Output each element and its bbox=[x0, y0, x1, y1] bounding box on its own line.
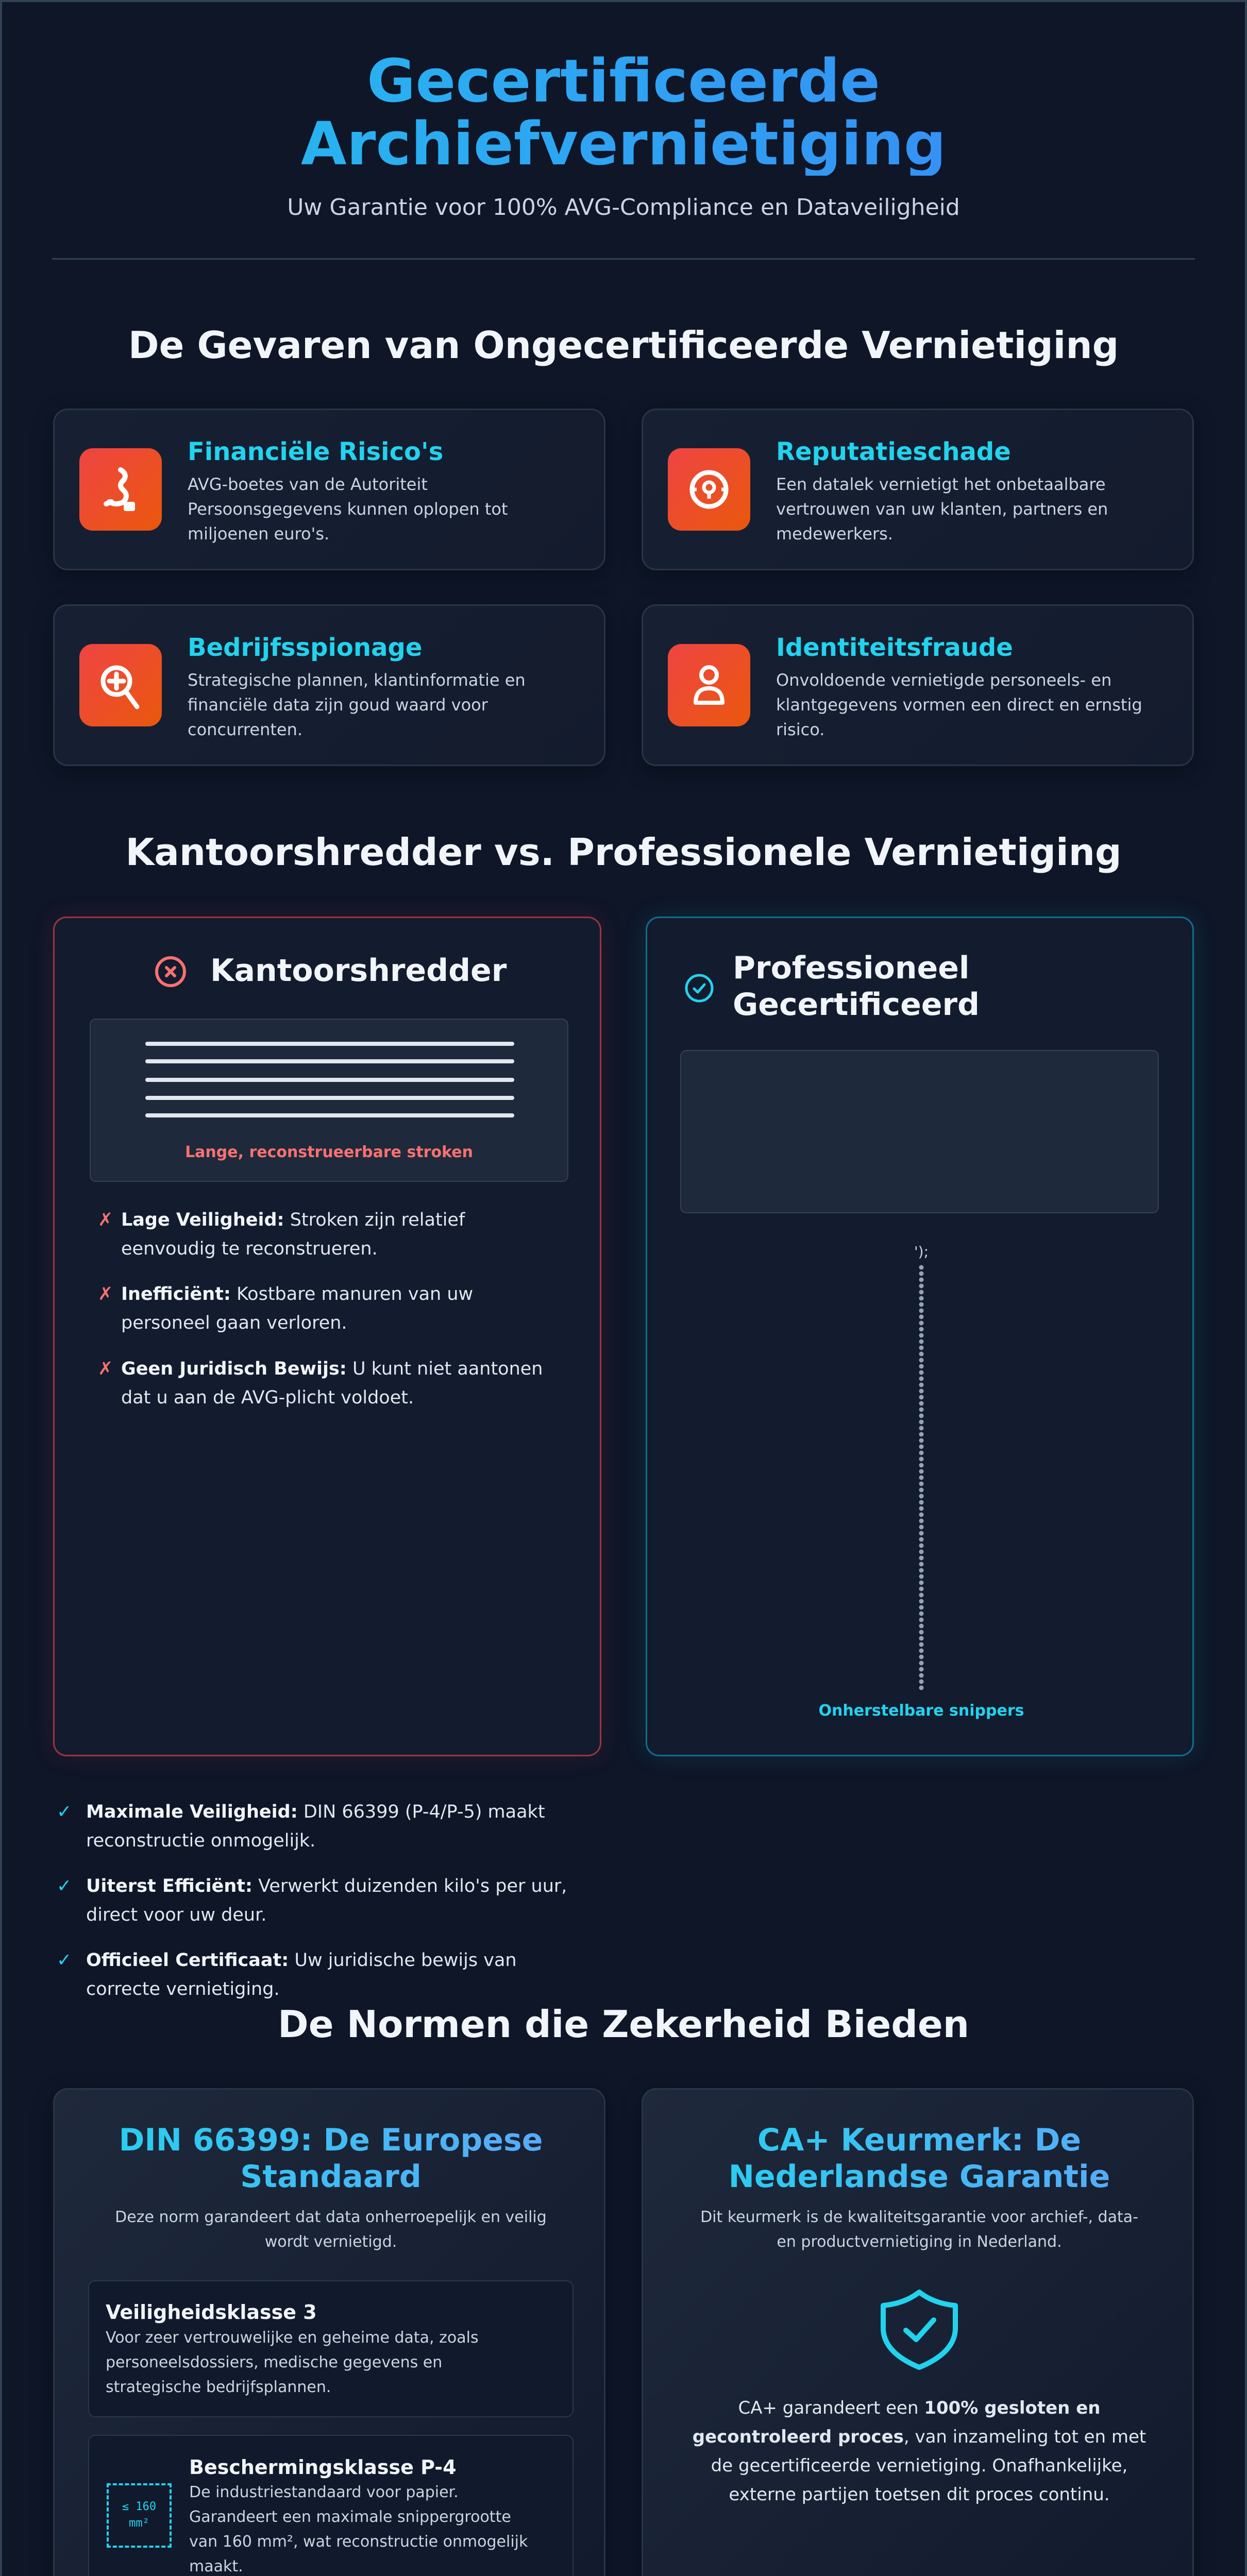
text: miljoenen euro's. bbox=[188, 524, 329, 544]
list: nadelen: Geen Juridisch Bewijs: U kunt niet aantonen bbox=[121, 1359, 543, 1379]
text: Onvoldoende vernietigde personeels- en bbox=[776, 670, 1111, 690]
icon: check circle bbox=[685, 974, 713, 1003]
title: CA+ Keurmerk: De bbox=[757, 2122, 1081, 2158]
panel: CA+ keurmerk bbox=[642, 2088, 1194, 2576]
shred visual bbox=[680, 1050, 1159, 1213]
icon: person bbox=[668, 644, 750, 726]
list: voordelen: reconstructie onmogelijk. bbox=[86, 1831, 315, 1851]
title: Bedrijfsspionage bbox=[188, 633, 422, 662]
list: nadelen: ✗ bbox=[98, 1210, 113, 1230]
icon: finance bbox=[79, 448, 162, 531]
text: Strategische plannen, klantinformatie en bbox=[188, 670, 526, 690]
box: veiligheidsklasse: personeelsdossiers, medische gegevens en bbox=[106, 2353, 442, 2371]
snippers column bbox=[919, 1265, 923, 1690]
text: body: de gecertificeerde vernietiging. Onafhankelijke, bbox=[711, 2455, 1127, 2476]
list: nadelen: Inefficiënt: Kostbare manuren van uw bbox=[121, 1284, 473, 1304]
box: beschermingsklasse: Garandeert een maximale snippergrootte bbox=[189, 2508, 511, 2526]
text: body bbox=[693, 2398, 1146, 2505]
panel: kantoorshredder bbox=[53, 917, 601, 1756]
title: Archiefvernietiging bbox=[301, 110, 946, 179]
heading: Gecertificeerd bbox=[733, 987, 980, 1023]
heading: Professioneel bbox=[733, 950, 969, 986]
heading: Kantoorshredder bbox=[210, 953, 507, 989]
heading: normen: De Normen die Zekerheid Bieden bbox=[278, 2003, 969, 2046]
text: body: gecontroleerd proces, van inzameling tot en met bbox=[693, 2427, 1146, 2447]
panel: identiteitsfraude bbox=[642, 604, 1194, 766]
list: nadelen: ✗ bbox=[98, 1284, 113, 1304]
shred visual bbox=[90, 1019, 568, 1182]
heading: vergelijking: Kantoorshredder vs. Professionele Vernietiging bbox=[125, 831, 1122, 874]
text bbox=[700, 2208, 1138, 2251]
list: voordelen: Officieel Certificaat: Uw juridische bewijs van bbox=[86, 1950, 517, 1971]
heading: gevaren: De Gevaren van Ongecertificeerde Vernietiging bbox=[128, 324, 1119, 367]
list: nadelen: personeel gaan verloren. bbox=[121, 1313, 347, 1333]
list: voordelen: direct voor uw deur. bbox=[86, 1905, 266, 1925]
list: voordelen bbox=[57, 1802, 567, 1999]
text: medewerkers. bbox=[776, 524, 893, 544]
title: Reputatieschade bbox=[776, 437, 1011, 466]
text: vertrouwen van uw klanten, partners en bbox=[776, 499, 1108, 519]
caption: Lange, reconstrueerbare stroken bbox=[185, 1143, 473, 1161]
icon: magnifier bbox=[79, 644, 162, 726]
text: Dit keurmerk is de kwaliteitsgarantie voor archief-, data- bbox=[700, 2208, 1138, 2226]
text: financiële data zijn goud waard voor bbox=[188, 695, 488, 715]
box: beschermingsklasse: maakt. bbox=[189, 2557, 243, 2575]
text: Persoonsgegevens kunnen oplopen tot bbox=[188, 499, 508, 519]
heading bbox=[733, 950, 980, 1023]
icon: snipper size: mm² bbox=[129, 2517, 149, 2530]
panel: professioneel bbox=[646, 917, 1194, 1756]
panel: bedrijfsspionage bbox=[53, 604, 605, 766]
text bbox=[188, 474, 508, 544]
panel: reputatieschade bbox=[642, 409, 1194, 570]
text bbox=[776, 474, 1108, 544]
subtitle: Uw Garantie voor 100% AVG-Compliance en Dataveiligheid bbox=[287, 194, 960, 221]
box: veiligheidsklasse: Veiligheidsklasse 3 bbox=[106, 2301, 317, 2324]
text: Deze norm garandeert dat data onherroepelijk en veilig bbox=[115, 2208, 547, 2226]
text: body: CA+ garandeert een 100% gesloten en bbox=[738, 2398, 1100, 2418]
text: wordt vernietigd. bbox=[265, 2233, 397, 2251]
title: Financiële Risico's bbox=[188, 437, 443, 466]
list: nadelen bbox=[98, 1210, 543, 1408]
box: beschermingsklasse: Beschermingsklasse P-4 bbox=[189, 2456, 457, 2479]
list: nadelen: eenvoudig te reconstrueren. bbox=[121, 1239, 378, 1259]
list: nadelen: Lage Veiligheid: Stroken zijn relatief bbox=[121, 1210, 465, 1230]
list: voordelen: correcte vernietiging. bbox=[86, 1979, 280, 1999]
title bbox=[643, 2122, 1195, 2195]
text: en productvernietiging in Nederland. bbox=[777, 2233, 1062, 2251]
text bbox=[188, 670, 526, 739]
list: nadelen: ✗ bbox=[98, 1359, 113, 1379]
list: nadelen: dat u aan de AVG-plicht voldoet. bbox=[121, 1387, 414, 1408]
text: concurrenten. bbox=[188, 720, 302, 739]
box: veiligheidsklasse: Voor zeer vertrouwelijke en geheime data, zoals bbox=[106, 2329, 479, 2347]
icon: x circle bbox=[155, 956, 186, 987]
text: klantgegevens vormen een direct en ernstig bbox=[776, 695, 1142, 715]
list: voordelen: ✓ bbox=[57, 1802, 72, 1822]
title: Standaard bbox=[240, 2159, 422, 2195]
list: voordelen: ✓ bbox=[57, 1950, 72, 1971]
icon: snipper size bbox=[107, 2483, 172, 2548]
icon: snipper size: ≤ 160 bbox=[122, 2500, 156, 2513]
list: voordelen: ✓ bbox=[57, 1876, 72, 1896]
text bbox=[776, 670, 1142, 739]
title: Gecertificeerde bbox=[367, 47, 880, 116]
panel: financiele risico's bbox=[53, 409, 605, 570]
panel: DIN 66399 bbox=[53, 2088, 605, 2576]
stray text: '); bbox=[914, 1243, 929, 1260]
box: veiligheidsklasse bbox=[88, 2280, 574, 2417]
text bbox=[115, 2208, 547, 2251]
caption: Onherstelbare snippers bbox=[819, 1702, 1024, 1720]
box: beschermingsklasse bbox=[88, 2435, 574, 2576]
list: voordelen: Maximale Veiligheid: DIN 66399 (P-4/P-5) maakt bbox=[86, 1802, 545, 1822]
box: beschermingsklasse: De industriestandaard voor papier. bbox=[189, 2483, 459, 2501]
list: voordelen: Uiterst Efficiënt: Verwerkt duizenden kilo's per uur, bbox=[86, 1876, 567, 1896]
box: beschermingsklasse: van 160 mm², wat reconstructie onmogelijk bbox=[189, 2533, 528, 2551]
icon: reputation bbox=[668, 448, 750, 531]
text: AVG-boetes van de Autoriteit bbox=[188, 474, 428, 494]
title: DIN 66399: De Europese bbox=[119, 2122, 543, 2158]
title: Identiteitsfraude bbox=[776, 633, 1013, 662]
icon: shield bbox=[881, 2290, 958, 2370]
title bbox=[0, 50, 1247, 176]
title: Nederlandse Garantie bbox=[729, 2159, 1110, 2195]
title bbox=[55, 2122, 607, 2195]
text: Een datalek vernietigt het onbetaalbare bbox=[776, 474, 1106, 494]
text: risico. bbox=[776, 720, 824, 739]
box: veiligheidsklasse: strategische bedrijfsplannen. bbox=[106, 2378, 331, 2396]
text: body: externe partijen toetsen dit proces continu. bbox=[729, 2484, 1110, 2505]
